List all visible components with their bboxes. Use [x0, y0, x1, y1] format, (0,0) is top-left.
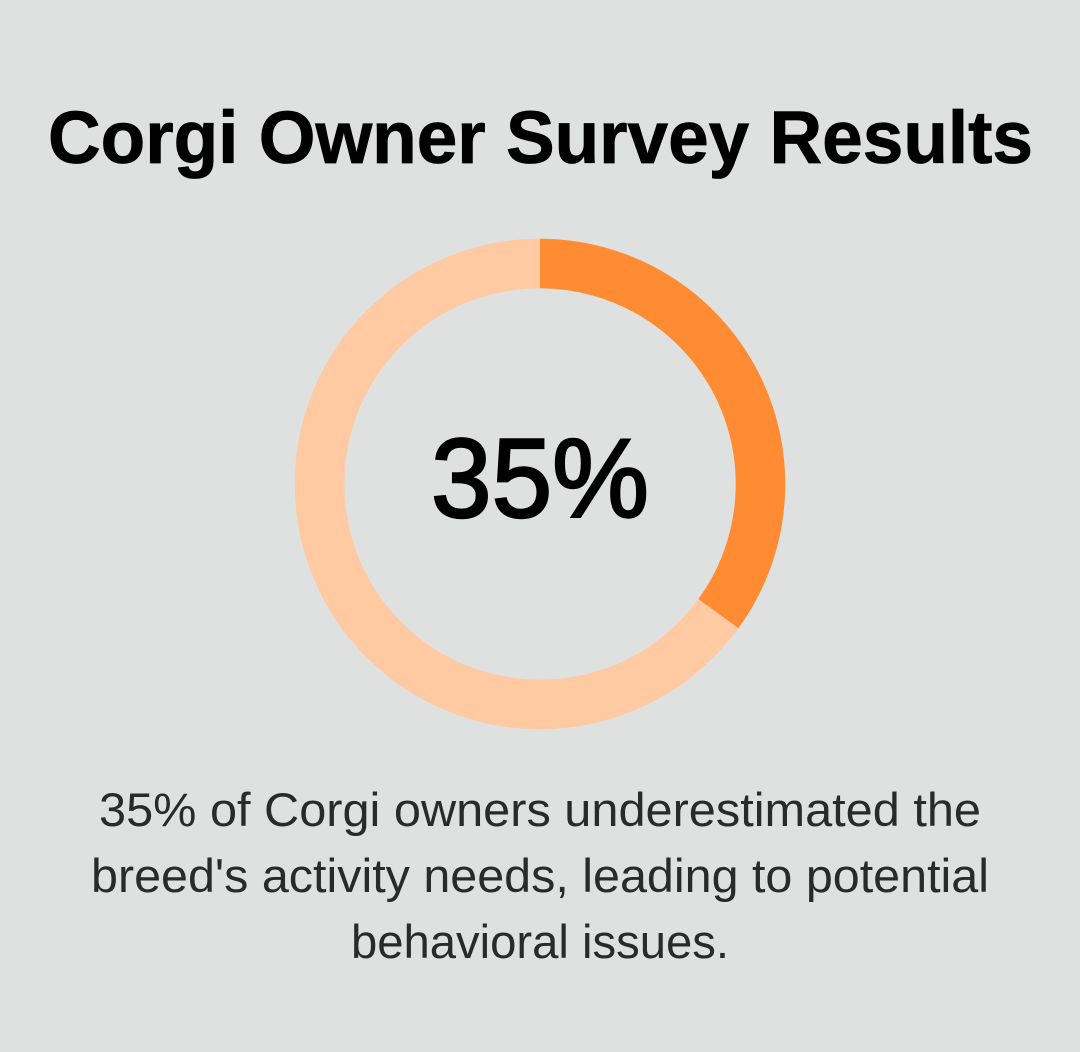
description text: 35% of Corgi owners underestimated the — [99, 783, 981, 836]
donut track — [320, 264, 760, 704]
donut value arc — [540, 264, 761, 614]
title: Corgi Owner Survey Results — [48, 96, 1033, 179]
description text: behavioral issues. — [351, 915, 729, 968]
donut chart: 35 percent — [320, 264, 761, 704]
description text — [91, 783, 989, 968]
center value: 35% — [431, 416, 649, 541]
description text: breed's activity needs, leading to potential — [91, 849, 989, 902]
